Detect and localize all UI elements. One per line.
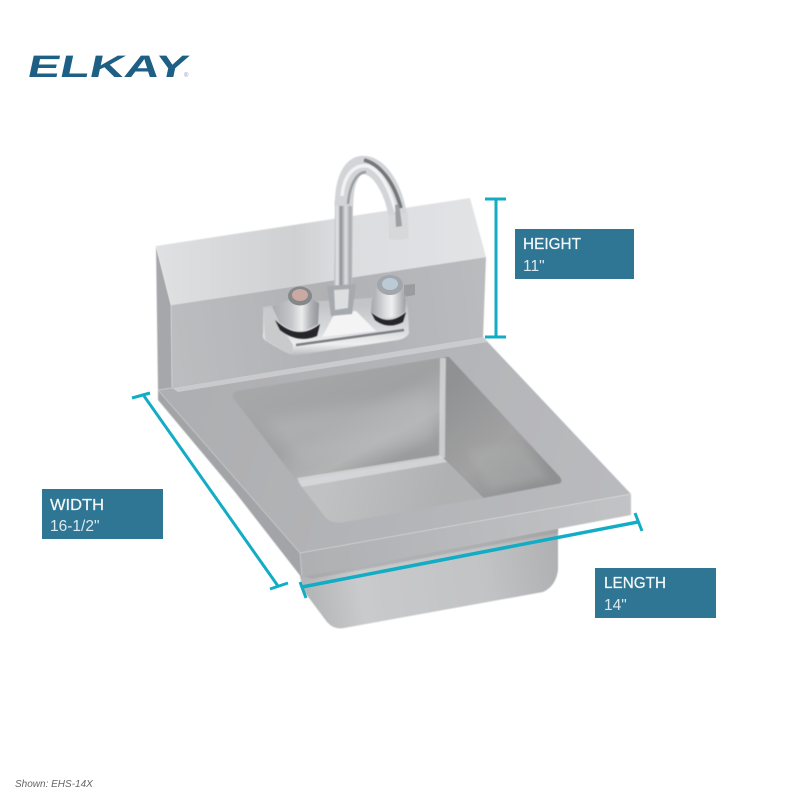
label: width xyxy=(42,489,163,539)
bowl opening back wall xyxy=(232,357,445,481)
illustration: stainless steel hand sink xyxy=(156,160,631,628)
footnote: model shown: Shown: EHS-14X xyxy=(15,779,93,790)
deck left lip xyxy=(158,390,302,578)
logo: Elkay: ELKAY xyxy=(25,49,192,84)
sink bowl body xyxy=(300,528,558,628)
bowl right wall lighter panel xyxy=(466,442,550,490)
spout tip xyxy=(388,213,408,240)
mounting peg xyxy=(404,284,415,297)
label: height: 11" xyxy=(523,258,545,275)
left handle xyxy=(272,286,320,339)
spout light reflection xyxy=(342,166,396,212)
spout collar xyxy=(327,284,356,316)
spout dark reflection xyxy=(364,160,401,208)
bowl soft reflection xyxy=(262,392,435,465)
bowl floor xyxy=(297,457,483,522)
logo: Elkay: ® xyxy=(184,72,189,79)
base plate dark band xyxy=(296,330,404,345)
spout arch xyxy=(344,165,398,217)
backsplash side edge xyxy=(156,246,172,390)
bowl vertical corner highlight xyxy=(439,358,446,458)
faucet xyxy=(263,160,415,355)
base plate xyxy=(263,296,409,355)
spout inner shading xyxy=(348,172,366,204)
label: width: WIDTH xyxy=(50,497,104,514)
label: height xyxy=(515,229,634,279)
backsplash vertical panel xyxy=(171,257,486,390)
backsplash sloped top xyxy=(156,198,486,305)
right handle xyxy=(371,275,406,326)
dimension line: width xyxy=(132,393,288,589)
dimension line: length xyxy=(300,513,642,598)
label: length xyxy=(595,568,716,618)
bowl corner highlight xyxy=(297,455,447,487)
base plate centre highlight xyxy=(322,311,376,337)
logo: Elkay xyxy=(25,49,192,84)
dimension line: height xyxy=(485,199,506,337)
deck rear highlight xyxy=(172,337,488,392)
deck front lip xyxy=(300,494,631,577)
faucet stem tube xyxy=(334,200,353,292)
label: height: HEIGHT xyxy=(523,236,582,253)
label: length: LENGTH xyxy=(604,575,666,592)
label: length: 14" xyxy=(604,597,627,614)
label: width: 16-1/2" xyxy=(50,518,99,535)
bowl shadow under deck xyxy=(300,528,558,579)
deck top surface xyxy=(158,337,631,553)
bowl right wall xyxy=(442,357,561,498)
base plate left fold xyxy=(264,309,293,354)
